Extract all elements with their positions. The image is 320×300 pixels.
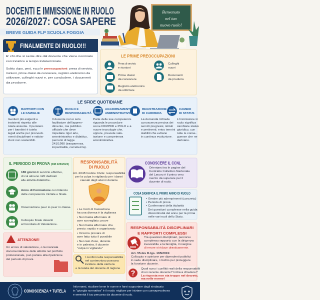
panel: il periodo di prova (4, 158, 72, 230)
callout: magnifier note (74, 254, 125, 274)
panel: responsabilita disciplinari (126, 222, 202, 280)
callout: magnifier note: e la tutela del docente di ragione (76, 266, 120, 270)
list: responsabilita: aver fatto tutto il possibile (77, 234, 112, 238)
text: disciplinary: complesso rapporto con la dirigenza (144, 238, 194, 242)
callout: question: La risposta non sta troppo nel decreto, (141, 274, 198, 278)
column: ruolo e responsabilita: Il docente non è solo (52, 117, 81, 121)
icon: trophy (6, 41, 16, 52)
list: responsabilita: • Le Corti di Cassazione (77, 207, 110, 211)
column: ruolo e responsabilita: 241/1990 (trasparenza, (52, 142, 84, 146)
panel: attenzione (4, 232, 72, 276)
item: prime classi: da conoscere (118, 77, 137, 81)
step: anno di formazione: Anno di Formazione con bilancio (21, 188, 68, 192)
column: ruolo e responsabilita: imparzialità, correttezza). (52, 145, 87, 149)
list: responsabilita: • Non basta affermare che (77, 223, 113, 227)
callout: question: di un recente docente? Inizia a chiedere? (141, 270, 198, 274)
text: warning: Un errore di valutazione, o la mancata (6, 245, 59, 249)
column: aggiornamento amministrativo: Parte delle sue competenze (93, 117, 132, 121)
panel: le prime preoccupazioni (100, 50, 196, 95)
icon: chalkboard (151, 4, 192, 31)
column: rapporti con le famiglie: tutele assunte. Il pensiero (8, 124, 44, 128)
column: registrazione di carriera: e pertinenti, entro termini (141, 128, 176, 132)
text: intro (6, 54, 93, 84)
icon: chalkboard: nuovo ruolo! (160, 22, 182, 28)
column: cambio di status: cambiare status (177, 124, 199, 128)
column: rapporti con le famiglie: legali anche per provvedi- (8, 131, 43, 135)
column: ruolo e responsabilita: RESPONSABILITÀ (65, 110, 92, 115)
text: intro: con incarico a tempo indeterminato. (6, 59, 62, 63)
column: aggiornamento amministrativo: AMMINISTRATIVO (105, 111, 132, 115)
column: registrazione di carriera: La domanda richiede (141, 117, 170, 121)
icon: small plant (178, 38, 186, 48)
list: Dei questioni complesse nella guida (148, 208, 198, 212)
column: ruolo e responsabilita: dimento, ma pubblico (52, 124, 82, 128)
text: warning: del periodo di prova. (6, 257, 34, 261)
step: 180 giorni: alle attività didattiche. (21, 178, 51, 182)
column: rapporti con le famiglie: RAPPORTI CON (21, 107, 44, 111)
step: colloquio (6, 216, 58, 228)
step: 180 giorni: 180 giorni di servizio effettivo, (21, 170, 63, 174)
item: registro elettronico (105, 83, 145, 93)
column: rapporti con le famiglie (8, 106, 44, 142)
column: ruolo e responsabilita: facilitatore dell'appren- (52, 120, 83, 124)
column: ruolo e responsabilita: ufficiale che deve (52, 128, 76, 132)
column: cambio di status: giuridico, con (177, 128, 196, 132)
footer text (73, 284, 170, 296)
icon: books (101, 29, 119, 46)
column: ruolo e responsabilita: percorsi di legge (52, 138, 75, 142)
icon: clipboard (130, 197, 142, 215)
column: registrazione di carriera: stabiliti che evitano (141, 131, 167, 135)
column: registrazione di carriera: in continua evoluzione. (141, 134, 173, 138)
list: responsabilita: • Occorre provare di (77, 231, 105, 235)
step: osservazione: Osservazione peer to peer in classe. (21, 205, 71, 209)
panel: conoscere il ccnl (126, 158, 197, 188)
column: aggiornamento amministrativo: amministrativa. (93, 138, 114, 142)
column: aggiornamento amministrativo: riguarda le procedure (93, 120, 123, 124)
step: colloquio: al Comitato di Valutazione. (21, 222, 58, 226)
list: responsabilita: "culpa in vigilando" (77, 246, 103, 250)
text: disciplinary: Colloquio e opinione per dipendenti pubblici (131, 254, 191, 258)
text: ccnl: Contratto Collettivo Nazionale (149, 169, 190, 173)
item: documenti: Documenti (168, 73, 183, 77)
text: ccnl: del Lavoro è il primo vero (149, 172, 184, 176)
icon: folder (54, 260, 68, 272)
heading (130, 225, 194, 236)
list: responsabilita: ha una diversa è la vigilanza (77, 210, 116, 214)
column: ruolo e responsabilita: rispettare rigor ario, (52, 131, 79, 135)
column: registrazione di carriera: servizi pregressi, istituti (141, 124, 173, 128)
heading (80, 160, 118, 170)
heading: attenzione: ATTENZIONE! (18, 237, 40, 242)
text: art 2048 (73, 171, 125, 182)
list: discontinuità del anno per la prima (148, 211, 195, 215)
text: disciplinary: inesorabile e la famiglia, il margine (144, 242, 192, 246)
item: registro elettronico: Registro elettronico (118, 84, 145, 88)
callout: magnifier note: I confini nella responsabilità (85, 255, 123, 259)
text: disciplinary: Tra questioni disciplinari, percorso (144, 235, 191, 239)
column: registrazione di carriera: conoscenza precisa dei (141, 120, 174, 124)
text: disciplinary: in sede disciplinare, i rischio per proteggere (131, 258, 191, 262)
heading: RESPONSABILITÀ (80, 160, 118, 164)
icon: book (128, 166, 146, 182)
text: art 2048: per la culpa in vigilando per i danni (75, 174, 123, 178)
text: art 2048: causati dagli alunni durante (80, 178, 118, 182)
panel: responsabilita di ruolo (73, 158, 125, 252)
icon: shield with teacher (89, 183, 109, 205)
text: intro: utilizzare, colleghi nuovi e, per concludere, i documenti (6, 76, 91, 80)
column: cambio di status: DI STATUS (179, 111, 194, 115)
list: responsabilita: aver sorvegliato: prove (77, 218, 109, 222)
heading: sfide: LE SFIDE QUOTIDIANE (78, 100, 123, 104)
heading: E RAPPORTI COMPLESSI (137, 230, 187, 236)
heading: CONOSCERE IL CCNL (145, 160, 181, 166)
column: rapporti con le famiglie: per i bambini è tutela (8, 128, 37, 132)
column: ruolo e responsabilita: amministrativo e didattico, (52, 134, 88, 138)
heading: preoccupazioni: LE PRIME PREOCCUPAZIONI (121, 54, 175, 58)
column: registrazione di carriera: DI CARRIERA (142, 111, 163, 115)
column: cambio di status: derivano. (177, 138, 190, 142)
panel: le sfide quotidiane (4, 98, 199, 154)
text: intro: Subito dopo, però, ecco le preoccupazioni: presa di servizio, (6, 66, 93, 70)
column: aggiornamento amministrativo: come DDI/PDD e POLO e a (93, 124, 132, 128)
icon: magnifier (76, 256, 84, 264)
text: art 2048: Art. 2048 Codice Civile: responsabilità (73, 171, 125, 175)
item: colleghi nuovi: Colleghi (168, 62, 179, 66)
text: intro: da produrre. (6, 80, 27, 84)
column: cambio di status: ruolo significa (177, 120, 196, 124)
column: aggiornamento amministrativo: AGGIORNAMENTO (105, 107, 133, 111)
column: rapporti con le famiglie: LE FAMIGLIE (21, 111, 40, 115)
text: disciplinary: Art. 55-bis D.lgs. 165/2001: (131, 251, 170, 255)
icon: laptop (150, 35, 180, 49)
item: presa di servizio: e riunioni (118, 66, 131, 70)
list: responsabilita (77, 207, 116, 250)
item: colleghi nuovi (154, 60, 179, 70)
callout: question (128, 266, 202, 280)
step: anno di formazione: delle competenze iniziale e finale. (21, 192, 67, 196)
text: ccnl: Orientarsi tra le pagine del (149, 166, 186, 170)
list: • Periodo di prova (146, 200, 171, 204)
column: rapporti con le famiglie: Genitori più esigenti e (8, 117, 38, 121)
text: disciplinary: la funzione docente. (131, 262, 159, 266)
callout: magnifier note: incidere della carriera (85, 262, 115, 266)
icon: chalkboard: nel tuo (165, 16, 177, 21)
item: prime classi (105, 72, 137, 82)
item: presa di servizio (104, 60, 136, 70)
heading: RESPONSABILITÀ DISCIPLINARI (130, 225, 194, 230)
item: documenti (154, 72, 184, 82)
column: cambio di status (167, 106, 199, 142)
list: nelle vari ruoli dello Stato. (148, 214, 184, 218)
column: rapporti con le famiglie: insistenti rispetto alle (8, 120, 37, 124)
callout: magnifier note: nel contenzioso possono (85, 258, 119, 262)
footer text: e serenità il tuo percorso da docente di ruolo. (73, 292, 133, 296)
panel: primo anno di ruolo (126, 190, 198, 220)
footer text: Informarsi, studiare bene le norme e farsi supportare dagli sindacato (73, 284, 164, 288)
footer heading: CONOSCENZA + TUTELA (24, 288, 67, 294)
list: responsabilita: • Nei casi d'uso, durante (77, 239, 111, 243)
illustration: teacher at desk with chalkboard (101, 4, 199, 49)
column: cambio di status: CAMBIO (179, 107, 192, 111)
panel: finalmente di ruolo (3, 39, 98, 94)
icon: gavel (128, 236, 140, 250)
heading: DI RUOLO (89, 164, 110, 170)
step: 180 giorni: di cui almeno 120 dedicati (21, 174, 57, 178)
column: aggiornamento amministrativo: tazione e competenza (93, 134, 124, 138)
column: aggiornamento amministrativo: nuove tecnologie che, (93, 128, 123, 132)
column: aggiornamento amministrativo: oppure, prevede valu- (93, 131, 123, 135)
text: ccnl: docente di ruolo. (149, 180, 172, 184)
heading: prova: IL PERIODO DI PROVA (DM 226/2022) (9, 161, 69, 166)
column: cambio di status: guenze che ne (177, 134, 198, 138)
footer (0, 282, 200, 300)
text: intro: riunioni, prime classi da conoscere, registro elettronico da (6, 71, 90, 75)
column: registrazione di carriera: REGISTRAZIONE (142, 107, 167, 111)
list: • Confermarsi della titolarità (146, 204, 184, 208)
callout: question: ? (131, 270, 135, 278)
footer text: in "giungla normativa" è il modo migliore per iniziare con consapevolezza (73, 288, 170, 292)
list: responsabilita: e in palestra, il docente (77, 242, 109, 246)
icon: warning (6, 235, 16, 243)
item: presa di servizio: Presa di servizio (118, 62, 136, 66)
text: intro: E' chi che si sente dire dal docente che viene nominato (6, 54, 93, 58)
list: responsabilita: • Non basta affermare di (77, 215, 111, 219)
item: documenti: da produrre (168, 77, 184, 81)
icon: lightbulb (8, 284, 22, 298)
list (146, 196, 198, 218)
icon: chalkboard: Benvenuto (162, 10, 180, 14)
column: rapporti con le famiglie: menti disciplinari e valuta- (8, 134, 44, 138)
text: ccnl: mezzo da superare per il (149, 176, 183, 180)
column: ruolo e responsabilita (52, 106, 92, 149)
column: ruolo e responsabilita: RUOLO E (65, 107, 79, 111)
icon: plant (188, 21, 199, 46)
title: DOCENTI E IMMISSIONE IN RUOLO (6, 6, 114, 18)
item: prime classi: Prime classi (118, 73, 135, 77)
text: disciplinary: di errore si riduce drasticamente. (144, 246, 189, 250)
callout: question: ma nelle norme! (141, 276, 165, 280)
step: anno di formazione (6, 186, 68, 198)
text: disciplinary (131, 235, 194, 266)
heading: finalmente: FINALMENTE DI RUOLO!!! (20, 44, 86, 50)
text: warning (6, 245, 63, 261)
icon: shield (182, 286, 192, 299)
title (6, 6, 116, 28)
column: aggiornamento amministrativo (93, 106, 133, 142)
subtitle (0, 28, 100, 36)
list: responsabilita: presto: rapido e organizzato (77, 226, 116, 230)
item: registro elettronico: da utilizzare (118, 88, 135, 92)
column: rapporti con le famiglie: zioni non sostenibili. (8, 138, 36, 142)
step: colloquio: Colloquio finale davanti (21, 218, 53, 222)
column: cambio di status: tutte le conse- (177, 131, 196, 135)
subtitle: BREVE GUIDA FLP SCUOLA FOGGIA (6, 30, 85, 35)
item: colleghi nuovi: nuovi (168, 66, 176, 70)
column: registrazione di carriera (130, 106, 176, 138)
title: 2026/2027: COSA SAPERE (6, 16, 116, 28)
step: 180 giorni (6, 169, 63, 182)
column: cambio di status: L'immissione in (177, 117, 198, 121)
text: warning: professionale, può portare alla ripetizione (6, 253, 63, 257)
text: ccnl (149, 166, 190, 184)
text: warning: documentazione delle attività nel portfolio (6, 249, 63, 253)
list: • Gestire più adempimenti (concreto) (146, 196, 196, 200)
